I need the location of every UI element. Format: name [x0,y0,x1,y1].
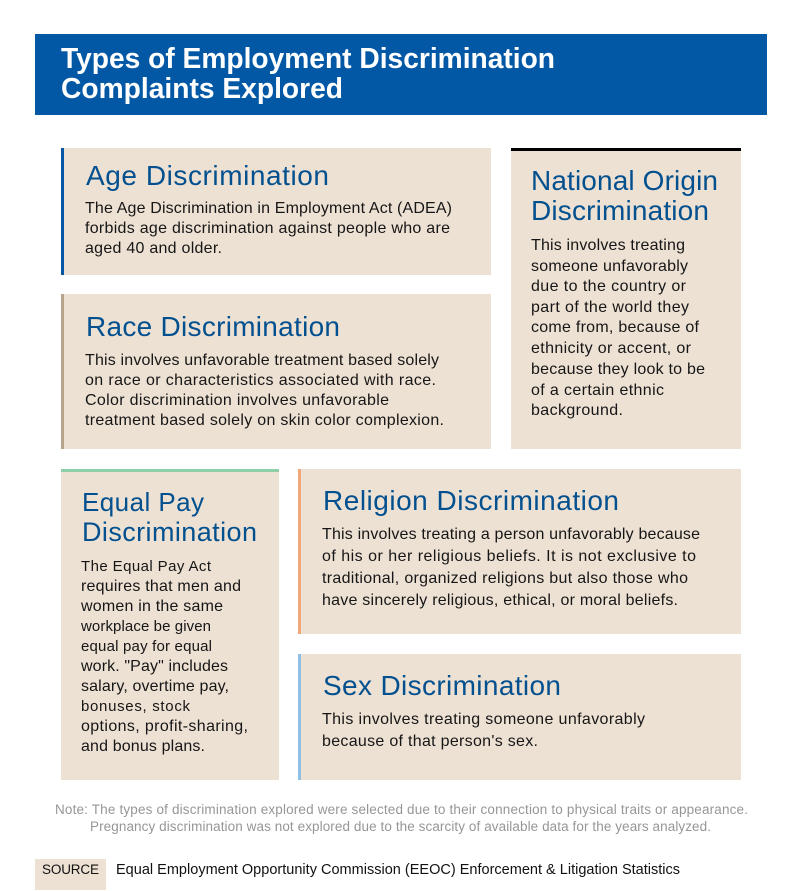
source: SOURCE [42,862,99,877]
panel: national origin discrimination: ethnicity or accent, or [531,340,692,357]
panel: age discrimination: forbids age discrimination against people who are [85,220,450,237]
source [35,859,680,890]
panel: religion discrimination: This involves treating a person unfavorably because [322,526,700,543]
panel: age discrimination [61,148,491,275]
panel: national origin discrimination: because they look to be [531,361,705,378]
title banner: Complaints Explored [61,73,343,105]
panel: race discrimination [61,294,491,449]
panel: national origin discrimination: background. [531,402,623,419]
panel: sex discrimination: because of that person's sex. [322,733,538,750]
panel: race discrimination: on race or characteristics associated with race. [85,372,436,389]
panel: age discrimination: The Age Discrimination in Employment Act (ADEA) [85,200,452,217]
panel: religion discrimination [298,469,741,634]
panel: sex discrimination [298,654,741,780]
panel: religion discrimination: Religion Discrimination [323,485,619,516]
panel: race discrimination: This involves unfavorable treatment based solely [85,352,439,369]
panel: equal pay discrimination: and bonus plans. [81,738,205,755]
panel: equal pay discrimination: salary, overtime pay, [81,678,229,695]
panel: equal pay discrimination: women in the same [80,598,223,615]
panel: equal pay discrimination: Discrimination [82,517,257,547]
panel: national origin discrimination: This involves treating [531,237,685,254]
panel: national origin discrimination: due to the country or [531,278,687,295]
note: Note: The types of discrimination explored were selected due to their connection to physical traits or appearance. [55,802,748,817]
panel: sex discrimination: Sex Discrimination [323,670,561,701]
panel: equal pay discrimination: workplace be given [80,618,211,635]
panel: equal pay discrimination: The Equal Pay Act [81,558,212,575]
panel: national origin discrimination: Discrimination [531,195,709,226]
panel: equal pay discrimination: Equal Pay [82,487,204,517]
source: Equal Employment Opportunity Commission (EEOC) Enforcement & Litigation Statistics [116,862,680,878]
panel: race discrimination: treatment based solely on skin color complexion. [85,412,444,429]
panel: equal pay discrimination [61,469,279,780]
note [55,802,748,834]
panel: sex discrimination: This involves treating someone unfavorably [322,711,645,728]
panel: national origin discrimination: someone unfavorably [531,258,688,275]
panel: age discrimination: aged 40 and older. [85,240,222,257]
panel: national origin discrimination [511,148,741,449]
panel: equal pay discrimination: work. "Pay" includes [80,658,228,675]
panel: national origin discrimination: National Origin [531,165,718,196]
panel: race discrimination: Color discrimination involves unfavorable [85,392,389,409]
panel: equal pay discrimination: requires that men and [81,578,241,595]
note: Pregnancy discrimination was not explored due to the scarcity of available data for the years analyzed. [90,819,711,834]
panel: race discrimination: Race Discrimination [86,311,340,342]
panel: religion discrimination: have sincerely religious, ethical, or moral beliefs. [322,592,678,609]
panel: equal pay discrimination: options, profit-sharing, [81,718,248,735]
panel: age discrimination: Age Discrimination [86,160,329,191]
panel: equal pay discrimination: equal pay for equal [81,638,212,655]
title banner [35,34,767,115]
title banner: Types of Employment Discrimination [61,43,555,75]
panel: religion discrimination: traditional, organized religions but also those who [322,570,688,587]
panel: religion discrimination: of his or her religious beliefs. It is not exclusive to [322,548,696,565]
panel: equal pay discrimination: bonuses, stock [81,698,190,715]
panel: national origin discrimination: part of the world they [531,299,689,316]
panel: national origin discrimination: of a certain ethnic [531,382,664,399]
panel: national origin discrimination: come from, because of [531,319,700,336]
